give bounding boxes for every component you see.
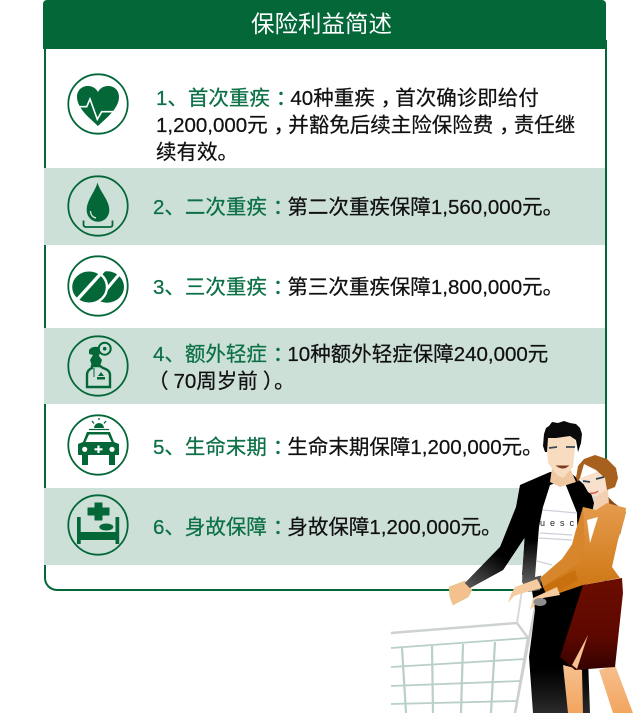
text: item 1: 1、首次重疾 ：40种重疾 ，首次确诊即给付 bbox=[156, 87, 539, 110]
text: item 6: 6、身故保障 ：身故保障1,200,000元。 bbox=[153, 516, 502, 539]
man's T-shirt: uesc bbox=[540, 518, 579, 528]
woman's head bbox=[576, 455, 618, 497]
woman's hands bbox=[508, 579, 560, 610]
row band 4 bbox=[44, 328, 605, 404]
icon: medicine bottle bbox=[67, 335, 129, 397]
woman's neck bbox=[592, 488, 609, 520]
woman's skirt bbox=[560, 578, 623, 670]
woman's braid bbox=[602, 485, 626, 535]
icon: water drop bbox=[67, 175, 129, 237]
text: item 1: 续有效。 bbox=[156, 141, 238, 164]
icon: hospital bed bbox=[67, 494, 129, 556]
man's jacket bbox=[465, 472, 594, 592]
heading: panel title: 保险利益简述 bbox=[251, 11, 392, 37]
man's head bbox=[543, 421, 582, 487]
woman's blouse bbox=[587, 517, 598, 543]
text: item 4 bbox=[148, 343, 548, 393]
woman's legs bbox=[563, 665, 633, 713]
text: item 5: 5、生命末期 ：生命末期保障1,200,000元。 bbox=[153, 436, 543, 459]
text: item 1: 1,200,000元 ，并豁免后续主险保险费 ，责任继 bbox=[156, 114, 575, 137]
icon: ambulance bbox=[67, 414, 129, 476]
heading: panel title bbox=[43, 0, 606, 49]
row band 2 bbox=[44, 168, 605, 245]
text: item 4: （70周岁前）。 bbox=[148, 370, 295, 393]
icon: heart with pulse bbox=[67, 73, 129, 135]
text: item 1 bbox=[156, 87, 575, 164]
text: item 4: 4、额外轻症 ：10种额外轻症保障240,000元 bbox=[153, 343, 548, 366]
text: item 2: 2、二次重疾 ：第二次重疾保障1,560,000元。 bbox=[153, 196, 563, 219]
man's T-shirt bbox=[535, 483, 579, 577]
shopping cart bbox=[391, 590, 535, 713]
text: item 3: 3、三次重疾 ：第三次重疾保障1,800,000元。 bbox=[153, 276, 563, 299]
icon: pills bbox=[67, 255, 129, 317]
woman's jacket bbox=[540, 503, 626, 597]
man's trousers bbox=[529, 578, 590, 713]
cart handle bbox=[534, 598, 546, 606]
panel: benefits frame bbox=[44, 40, 607, 591]
row band 6 bbox=[44, 488, 605, 565]
man's hand bbox=[449, 581, 472, 605]
